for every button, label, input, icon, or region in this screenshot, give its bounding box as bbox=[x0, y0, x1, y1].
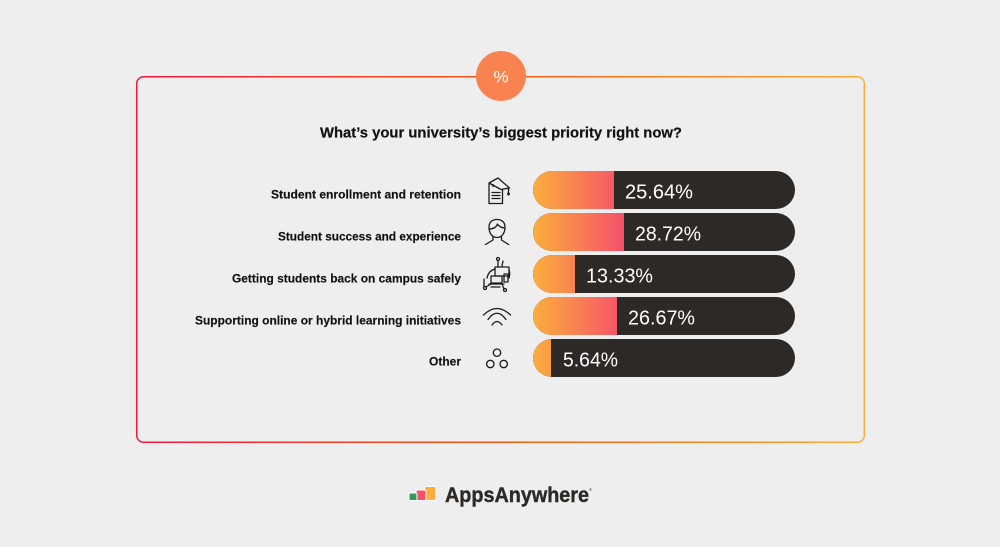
value: 25.64% bbox=[625, 182, 693, 204]
row: other bbox=[429, 339, 795, 377]
icon: connected devices bbox=[484, 258, 510, 292]
logo mark bbox=[409, 486, 436, 500]
registered mark: ® bbox=[589, 487, 592, 492]
wordmark: AppsAnywhere bbox=[445, 484, 589, 507]
label: Getting students back on campus safely bbox=[232, 274, 462, 286]
icon: graduation cap on document bbox=[489, 178, 510, 204]
bar: 28.72% bbox=[533, 213, 795, 251]
label: Student success and experience bbox=[278, 232, 461, 244]
panel: gradient outlined frame bbox=[137, 77, 864, 442]
row: student success and experience bbox=[278, 213, 795, 251]
bar: 26.67% bbox=[533, 297, 795, 335]
label: Student enrollment and retention bbox=[271, 190, 461, 202]
row: supporting online or hybrid learning initiatives bbox=[195, 297, 795, 335]
bar: 13.33% bbox=[533, 255, 795, 293]
infographic canvas bbox=[136, 51, 866, 507]
label: Other bbox=[429, 356, 462, 368]
bar: 5.64% bbox=[533, 339, 795, 377]
icon: student head bbox=[486, 220, 508, 244]
icon: wifi signal bbox=[484, 308, 510, 325]
row: getting students back on campus safely bbox=[232, 255, 795, 293]
value: 5.64% bbox=[563, 350, 618, 372]
bar: 25.64% bbox=[533, 171, 795, 209]
label: Supporting online or hybrid learning initiatives bbox=[195, 316, 461, 328]
icon: three circles bbox=[487, 349, 507, 368]
logo: AppsAnywhere bbox=[409, 484, 592, 507]
row: student enrollment and retention bbox=[271, 171, 795, 209]
icon: percent badge bbox=[476, 51, 526, 101]
value: 28.72% bbox=[635, 224, 701, 246]
title: What’s your university’s biggest priority right now? bbox=[320, 124, 682, 142]
value: 26.67% bbox=[628, 308, 695, 330]
icon: percent badge: % bbox=[493, 68, 509, 86]
value: 13.33% bbox=[586, 266, 653, 288]
